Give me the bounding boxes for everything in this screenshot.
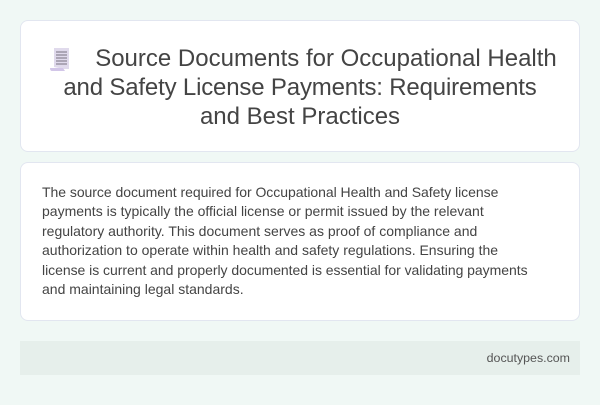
- footer bar: [20, 341, 580, 375]
- text block: description: The source document required for Occupational Health and Safety license: [42, 184, 498, 200]
- title: [63, 45, 557, 130]
- text block: description: [42, 184, 528, 297]
- title: and Best Practices: [200, 103, 400, 130]
- icon: document receipt: [50, 48, 69, 71]
- title: Source Documents for Occupational Health: [95, 45, 557, 72]
- panel: description card: [20, 162, 580, 321]
- text block: description: license is current and properly documented is essential for validating payments: [42, 262, 528, 278]
- text block: description: payments is typically the official license or permit issued by the relevant: [42, 203, 484, 219]
- footer: source label: docutypes.com: [487, 351, 570, 365]
- text block: description: regulatory authority. This document serves as proof of compliance and: [42, 223, 477, 239]
- panel: title card: [20, 20, 580, 152]
- text block: description: and maintaining legal standards.: [42, 281, 244, 297]
- title: and Safety License Payments: Requirements: [63, 74, 537, 101]
- text block: description: authorization to operate within health and safety regulations. Ensuring the: [42, 242, 498, 258]
